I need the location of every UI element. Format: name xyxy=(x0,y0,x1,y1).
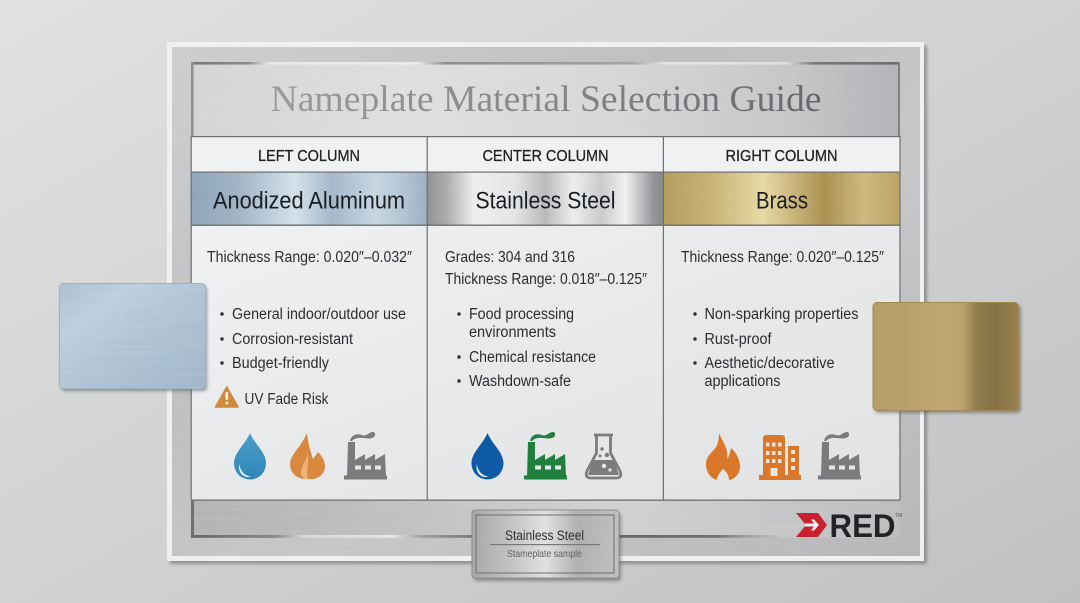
right column text: Rust-proof xyxy=(704,331,772,348)
icon: water drop dark blue xyxy=(472,433,504,480)
panel: brass sample xyxy=(873,302,1021,413)
column headings xyxy=(258,148,838,165)
icon: warning triangle xyxy=(216,387,238,407)
logo: RED xyxy=(796,508,902,544)
right column text xyxy=(681,249,884,390)
left column text: UV Fade Risk xyxy=(244,391,329,408)
logo: RED: TM xyxy=(895,513,902,519)
center column text: Washdown-safe xyxy=(469,373,571,390)
icon: flame orange xyxy=(290,433,325,479)
center column text: Food processing xyxy=(469,306,574,323)
icon: factory green xyxy=(524,432,567,480)
title band xyxy=(191,62,900,136)
icon: building xyxy=(759,435,801,480)
title: Nameplate Material Selection Guide xyxy=(270,79,822,120)
panel: table xyxy=(191,136,901,501)
icon: factory gray right xyxy=(818,432,861,480)
left column text: General indoor/outdoor use xyxy=(232,306,406,323)
sheet shadow xyxy=(170,46,927,564)
sample caption: Stameplate sample xyxy=(507,548,582,560)
header row xyxy=(191,136,900,172)
sample title: Stainless Steel xyxy=(505,528,584,543)
column headings: RIGHT COLUMN xyxy=(726,148,838,165)
material names: Brass xyxy=(756,188,808,214)
column headings: CENTER COLUMN xyxy=(482,148,608,165)
center column text xyxy=(445,249,647,390)
right column text: applications xyxy=(704,373,781,390)
right column text: Non-sparking properties xyxy=(704,306,859,323)
material swatches xyxy=(191,172,900,225)
center column text: environments xyxy=(469,324,556,341)
right column text: Aesthetic/decorative xyxy=(704,355,834,372)
column headings: LEFT COLUMN xyxy=(258,148,360,165)
center column text: Thickness Range: 0.018″–0.125″ xyxy=(445,271,647,288)
panel: anodized aluminum sample xyxy=(60,284,207,391)
icon: flame dark orange xyxy=(706,433,740,480)
panel: stainless steel sample plate xyxy=(472,510,621,581)
center column text: Chemical resistance xyxy=(469,349,596,366)
left column text: Thickness Range: 0.020″–0.032″ xyxy=(207,249,412,266)
left column text: Budget-friendly xyxy=(232,355,329,372)
column bodies xyxy=(191,225,900,500)
material names: Stainless Steel xyxy=(476,188,616,214)
logo: RED: RED xyxy=(830,508,896,544)
panel: guide sheet xyxy=(167,42,924,561)
center column text: Grades: 304 and 316 xyxy=(445,249,575,266)
left column text: Corrosion-resistant xyxy=(232,331,354,348)
right column text: Thickness Range: 0.020″–0.125″ xyxy=(681,249,884,266)
icon: factory gray left xyxy=(344,432,387,480)
left column text xyxy=(207,249,412,408)
material names xyxy=(213,188,808,214)
icon: water drop blue xyxy=(234,433,266,480)
material names: Anodized Aluminum xyxy=(213,188,405,214)
footer strip xyxy=(191,500,900,538)
grid lines xyxy=(191,136,901,501)
icon: flask xyxy=(586,435,621,478)
